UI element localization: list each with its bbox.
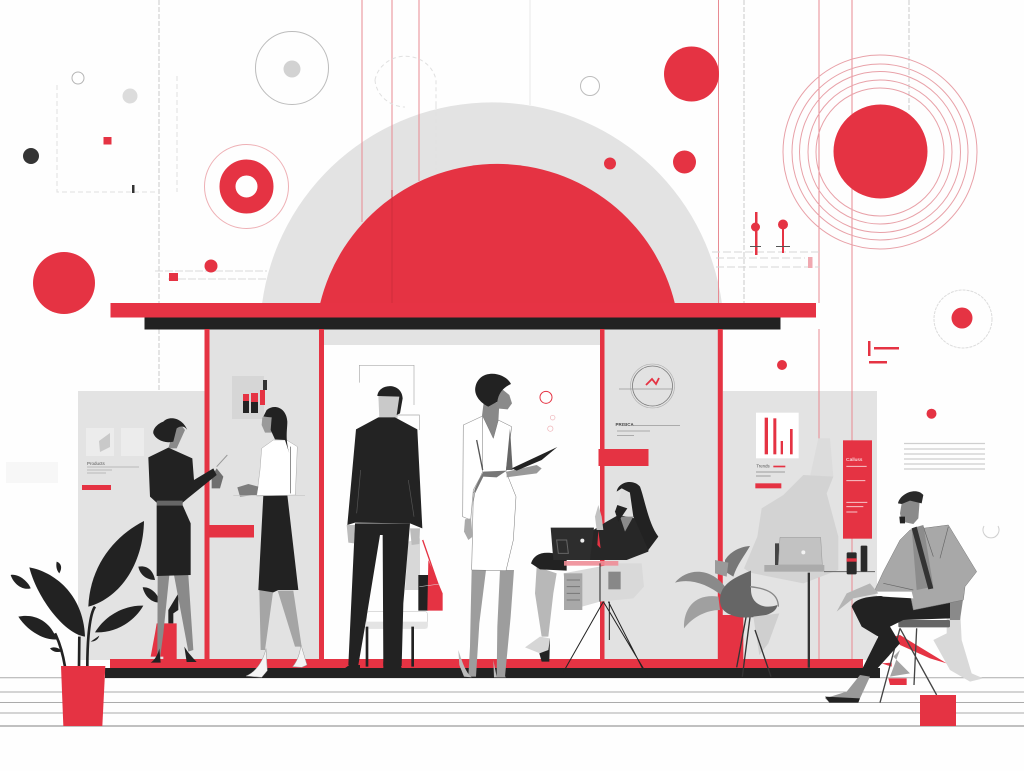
caption: Products <box>87 461 106 466</box>
concentric rings <box>783 55 977 249</box>
decorative circles: right <box>580 46 999 538</box>
left panel content <box>82 428 144 490</box>
jacket <box>873 525 977 610</box>
red square <box>104 137 112 144</box>
chair <box>563 563 644 610</box>
hands <box>347 525 420 545</box>
jacket <box>347 417 422 528</box>
seated man <box>825 491 983 703</box>
forearm <box>507 465 542 477</box>
jacket <box>148 448 217 503</box>
notebook <box>564 573 582 610</box>
T shaped mark <box>868 341 899 364</box>
shoes <box>151 647 197 663</box>
chair wisps <box>753 613 779 655</box>
hand and pen <box>212 468 223 488</box>
face <box>495 383 512 409</box>
jacket <box>588 515 650 560</box>
neck and face <box>168 422 185 448</box>
black base <box>105 668 880 678</box>
large red circle <box>33 252 95 314</box>
bar chart card <box>756 413 799 458</box>
blouse <box>257 440 297 496</box>
guide lines over right panel <box>819 391 852 660</box>
small red dot on dome <box>604 158 616 170</box>
chin shadow <box>615 505 627 522</box>
sleeve <box>463 416 483 520</box>
gray potted plant and chair <box>675 546 779 677</box>
red shopping bag <box>405 538 443 611</box>
face <box>618 488 630 510</box>
caption lines <box>87 467 139 473</box>
lower leg and foot <box>825 675 870 703</box>
roof black fascia <box>144 318 780 330</box>
chart caption: Trends <box>756 463 770 468</box>
roof <box>110 303 816 330</box>
blouse neckline <box>620 517 633 532</box>
face <box>262 416 272 433</box>
red strip <box>110 659 863 668</box>
small red dots <box>777 360 936 419</box>
legs <box>157 575 193 658</box>
red crossbars <box>209 449 648 538</box>
shirt front and tie <box>912 525 933 590</box>
gray text lines <box>904 444 985 469</box>
small red dot <box>204 260 218 272</box>
legs <box>535 567 557 637</box>
gray dot <box>122 88 138 104</box>
pale left text box <box>6 462 58 483</box>
hair <box>898 491 923 504</box>
red banner: Calluss <box>846 457 863 463</box>
hair <box>263 407 289 453</box>
hand left <box>464 518 473 540</box>
hair <box>617 482 658 550</box>
small hollow ring <box>72 72 84 84</box>
logo seal card <box>619 364 674 408</box>
side panels <box>78 391 877 660</box>
leaves <box>675 546 750 628</box>
hair <box>377 386 403 415</box>
legs <box>259 590 302 650</box>
head <box>378 395 402 418</box>
trousers <box>348 523 410 666</box>
red fabric <box>882 635 947 685</box>
arm <box>595 505 603 530</box>
bench <box>367 612 427 667</box>
red donut target <box>204 144 288 228</box>
woman in white blouse <box>233 407 307 677</box>
pale pink tab <box>808 257 812 268</box>
dress <box>472 416 516 571</box>
white shoes <box>246 645 307 677</box>
hand <box>837 583 878 612</box>
shoes <box>458 650 506 677</box>
red dot in ring <box>934 290 992 348</box>
chair legs <box>737 617 771 677</box>
faint image tiles <box>86 428 144 456</box>
skirt <box>258 495 298 592</box>
red marker <box>597 531 601 548</box>
table top <box>564 561 618 566</box>
chart caption <box>756 463 785 476</box>
skirt <box>157 505 191 576</box>
pin markers <box>750 212 790 255</box>
ring with gray dot <box>256 32 328 104</box>
white knee cloth <box>867 592 913 598</box>
red posts <box>204 329 723 661</box>
hand and cup <box>237 484 258 497</box>
decorative circles: left <box>23 32 328 314</box>
laptop <box>551 528 594 560</box>
black pin <box>132 185 134 193</box>
head <box>900 497 920 524</box>
red square on floor <box>920 695 956 726</box>
medium red dot <box>673 150 696 174</box>
bottles <box>847 546 867 574</box>
person group in left zoom coordinates <box>11 407 307 726</box>
inner wall panels <box>207 329 719 660</box>
floor platform <box>105 659 880 678</box>
tablet <box>512 447 557 471</box>
center figures in middle zoom coordinates <box>340 365 658 677</box>
skirt <box>531 553 567 571</box>
red button <box>82 485 111 490</box>
backdrop frame <box>359 365 419 430</box>
red button <box>755 483 781 488</box>
roof red slab <box>110 303 816 318</box>
small open ring <box>983 526 999 538</box>
small plant and red pot <box>138 566 178 659</box>
right figures in right zoom coordinates <box>675 413 983 726</box>
woman in black suit <box>148 418 227 663</box>
hollow ring <box>580 76 600 96</box>
trousers <box>852 596 950 677</box>
chair shell <box>720 571 777 617</box>
left potted plant <box>11 521 144 726</box>
red banner <box>843 440 872 539</box>
red pot <box>61 666 105 726</box>
black dot <box>23 148 39 164</box>
tripod table <box>562 563 648 677</box>
hair <box>475 374 511 407</box>
table <box>764 546 875 668</box>
big red sun <box>834 104 928 198</box>
man in black suit <box>340 386 422 672</box>
thin vertical guide lines <box>57 0 909 660</box>
stems <box>55 607 95 667</box>
floor lines <box>0 678 1024 726</box>
right wall caption <box>616 422 680 436</box>
woman in white dress <box>458 374 557 677</box>
hair <box>153 418 187 442</box>
small bar chart card <box>232 376 267 419</box>
chair <box>933 607 983 682</box>
small red tab <box>169 273 178 281</box>
chair legs <box>880 628 937 703</box>
shoes <box>340 662 402 672</box>
ghost figure <box>744 438 838 583</box>
gray dome <box>262 102 722 345</box>
red dome <box>320 164 675 304</box>
belt <box>157 501 183 505</box>
pink rings <box>540 391 555 431</box>
leaves <box>11 521 144 652</box>
laptop on table <box>775 537 822 565</box>
large red circle top <box>664 46 719 102</box>
red pot behind plant <box>718 615 743 659</box>
legs <box>468 570 514 677</box>
seated woman <box>525 482 658 677</box>
neck <box>482 400 499 439</box>
right wall caption: PRISICA <box>616 422 635 427</box>
